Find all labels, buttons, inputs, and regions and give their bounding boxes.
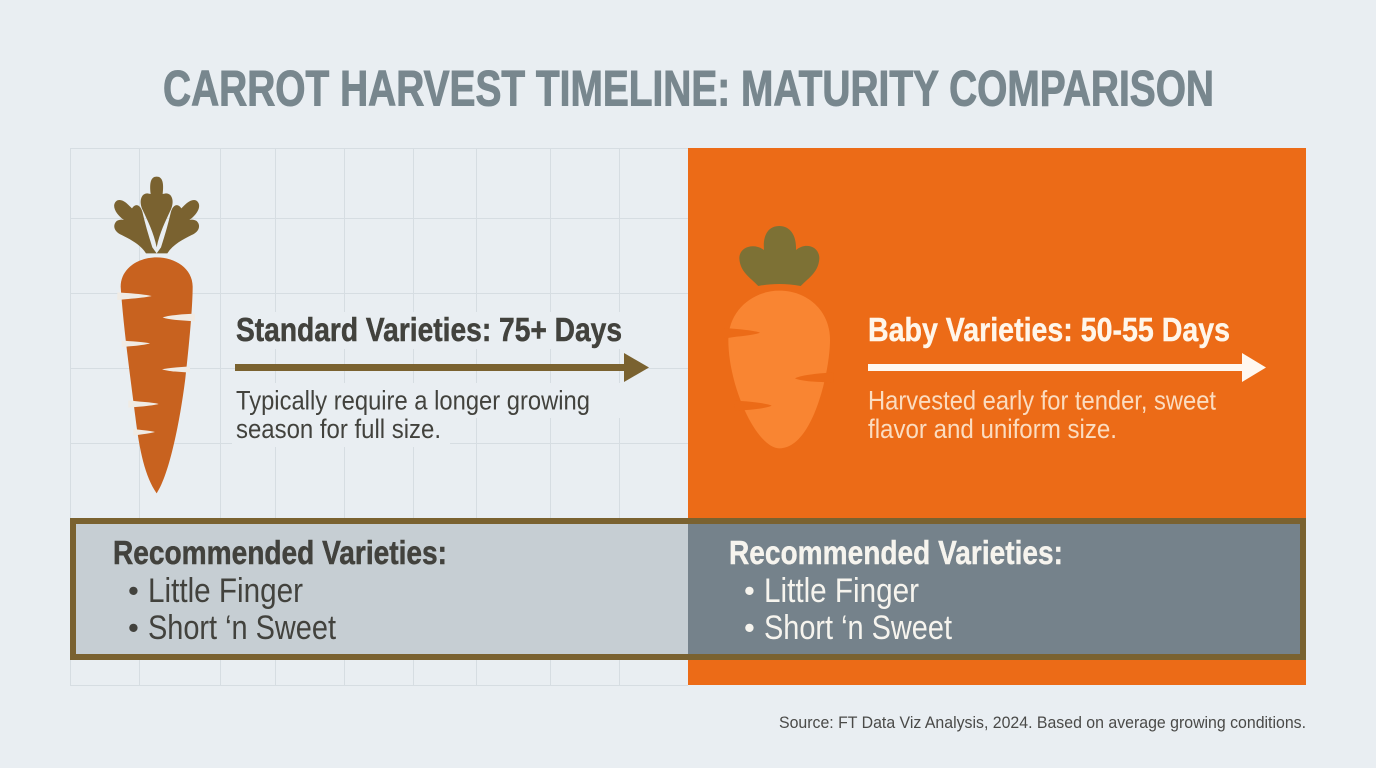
description: baby varieties: flavor and uniform size. [868, 414, 1117, 444]
list: baby recommended varieties: Recommended Varieties: [729, 534, 1063, 571]
list: baby recommended varieties: • [744, 610, 755, 645]
panel text: standard varieties [235, 311, 649, 444]
list: standard recommended varieties: Little Finger [148, 572, 303, 610]
list: baby recommended varieties: Short ‘n Sweet [764, 609, 952, 647]
description: standard varieties [236, 386, 590, 444]
description: standard varieties: Typically require a longer growing [236, 386, 590, 416]
description: baby varieties: Harvested early for tender, sweet [868, 386, 1216, 416]
panel text: baby varieties [868, 311, 1266, 444]
icon: baby carrot [725, 226, 833, 448]
panel: baby varieties background [688, 148, 1306, 685]
panel: recommended varieties band [73, 521, 1303, 657]
list: baby recommended varieties [729, 534, 1063, 647]
arrow: standard timeline [235, 353, 649, 382]
heading: standard varieties: Standard Varieties: 75+ Days [236, 311, 622, 348]
arrow: baby timeline [868, 353, 1266, 382]
heading: baby varieties: Baby Varieties: 50-55 Days [868, 311, 1230, 348]
list: standard recommended varieties: • [128, 573, 139, 608]
list: baby recommended varieties: • [744, 573, 755, 608]
icon: standard carrot [114, 177, 199, 493]
list: standard recommended varieties: Recommended Varieties: [113, 534, 447, 571]
source note: Source: FT Data Viz Analysis, 2024. Based on average growing conditions. [779, 713, 1306, 732]
list: standard recommended varieties: Short ‘n Sweet [148, 609, 336, 647]
description: standard varieties: season for full size. [236, 414, 441, 444]
list: standard recommended varieties [113, 534, 447, 647]
description: baby varieties [868, 386, 1216, 444]
list: standard recommended varieties: • [128, 610, 139, 645]
list: baby recommended varieties: Little Finger [764, 572, 919, 610]
